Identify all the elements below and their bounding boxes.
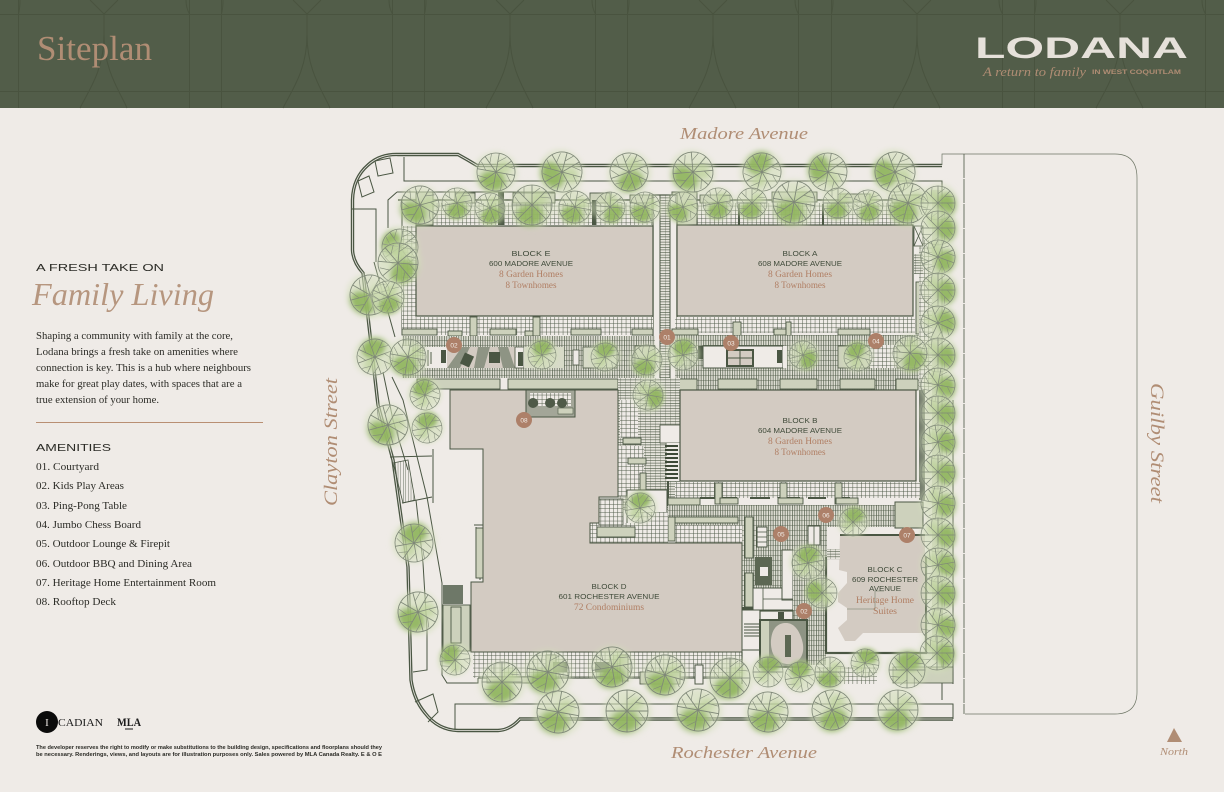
- label: block D: 72 Condominiums: [574, 602, 645, 612]
- label: block E: 8 Townhomes: [506, 280, 557, 290]
- title: Siteplan: [37, 29, 152, 68]
- logo: Lodana: [975, 32, 1188, 79]
- intro paragraph: Lodana brings a fresh take on amenities where: [36, 347, 238, 358]
- logos: Acadian and MLA: I: [45, 717, 49, 729]
- site plan: [339, 141, 1137, 740]
- lounge, firepit and BBQ features: [742, 517, 826, 665]
- street label: Guilby Street: Guilby Street: [1146, 383, 1167, 504]
- amenities list: [36, 443, 216, 608]
- block C footprint: [826, 535, 926, 653]
- paving south of block B: [620, 481, 923, 625]
- label: block A: 8 Townhomes: [774, 280, 826, 290]
- logo: Lodana: LODANA: [975, 32, 1188, 65]
- legal disclaimer: be necessary. Renderings, views, and layouts are for illustration purposes only. Sales powered by MLA Canada Realty. E & O E: [36, 752, 382, 758]
- west row trees: [339, 223, 478, 683]
- street label: Clayton Street: Clayton Street: [321, 377, 342, 506]
- text block: a fresh take on family living: [31, 262, 251, 406]
- label: block E: 600 MADORE AVENUE: [489, 259, 573, 268]
- amenities list: 06. Outdoor BBQ and Dining Area: [36, 559, 192, 570]
- marker 05: [773, 526, 789, 542]
- courtyard and plaza trees: [523, 327, 938, 610]
- trees: [339, 141, 963, 740]
- paving south of block D: [473, 652, 953, 684]
- amenities list: 04. Jumbo Chess Board: [36, 520, 142, 531]
- header banner: [0, 0, 1224, 108]
- label: block B: 8 Garden Homes: [768, 436, 833, 446]
- label: block A: [758, 249, 842, 290]
- intro paragraph: [36, 331, 251, 406]
- marker 07: [899, 527, 915, 543]
- amenities list: 07. Heritage Home Entertainment Room: [36, 578, 216, 589]
- marker 04: 04: [872, 338, 880, 346]
- marker 01: [659, 329, 675, 345]
- script heading: Family Living: [31, 276, 214, 312]
- street and property lines: [352, 154, 1137, 730]
- marker 07: 07: [903, 532, 911, 540]
- logos: Acadian and MLA: MLA: [117, 715, 141, 729]
- intro paragraph: Shaping a community with family at the core,: [36, 331, 233, 342]
- marker 05: 05: [777, 532, 785, 538]
- label: block D: 601 ROCHESTER AVENUE: [558, 592, 660, 601]
- label: block B: 8 Townhomes: [774, 447, 826, 457]
- marker 06: [818, 507, 834, 523]
- logos: Acadian and MLA: CADIAN: [58, 717, 103, 729]
- east row trees: [915, 183, 963, 673]
- amenities list: 02. Kids Play Areas: [36, 481, 124, 492]
- ping-pong court and chess board, east: [698, 345, 923, 368]
- marker 02 south: 02: [800, 608, 808, 616]
- amenities list: 03. Ping-Pong Table: [36, 501, 127, 512]
- label: block E: [489, 249, 573, 290]
- north arrow: [1159, 728, 1189, 758]
- central spine walkway: [653, 195, 677, 505]
- logo: Lodana: A return to family: [982, 64, 1086, 79]
- block D footprint: [450, 390, 742, 652]
- central plaza paving: [618, 378, 680, 510]
- label: block B: BLOCK B: [782, 416, 818, 425]
- amenity markers: [446, 329, 915, 619]
- courtyard brick paths: [402, 335, 920, 391]
- marker 02 south: [796, 603, 812, 619]
- rooftop deck: [526, 390, 575, 417]
- label: block C: 609 ROCHESTER: [852, 575, 918, 584]
- marker 02 west: 02: [450, 342, 458, 350]
- block B footprint: [680, 390, 916, 481]
- marker 03: [723, 335, 739, 351]
- marker 02 west: [446, 337, 462, 353]
- play area and courtyard features, west: [425, 346, 655, 368]
- block A footprint: [677, 225, 913, 316]
- label: block E: 8 Garden Homes: [499, 269, 564, 279]
- building labels: [489, 249, 918, 616]
- marker 08: [516, 412, 532, 428]
- label: block A: BLOCK A: [782, 249, 818, 258]
- intro paragraph: make for great play dates, with spaces that are a: [36, 379, 242, 390]
- label: block A: 608 MADORE AVENUE: [758, 259, 842, 268]
- marker 06: 06: [822, 512, 830, 520]
- street label: Madore Avenue: Madore Avenue: [679, 124, 809, 143]
- west service area of block D: [443, 518, 495, 651]
- label: block C: [852, 565, 918, 616]
- south-west patio of block D: [590, 499, 635, 543]
- intro paragraph: true extension of your home.: [36, 395, 159, 406]
- kids play area south: [742, 610, 807, 667]
- label: block A: 8 Garden Homes: [768, 269, 833, 279]
- street trees, Madore Avenue: [471, 141, 923, 204]
- paving and landscape: [398, 190, 953, 684]
- north row trees: [390, 176, 936, 235]
- label: block D: [558, 582, 660, 612]
- marker 08: 08: [520, 418, 528, 424]
- label: block B: [758, 416, 842, 457]
- label: block B: 604 MADORE AVENUE: [758, 426, 842, 435]
- label: block C: BLOCK C: [868, 565, 903, 574]
- eyebrow heading: A FRESH TAKE ON: [36, 262, 164, 274]
- intro paragraph: connection is key. This is a hub where neighbours: [36, 363, 251, 374]
- amenities list: 01. Courtyard: [36, 462, 100, 473]
- street trees, Rochester Avenue and south row: [479, 642, 928, 740]
- label: block C: AVENUE: [869, 584, 901, 593]
- paving south of blocks E and A: [402, 282, 922, 336]
- label: block C: Suites: [873, 606, 898, 616]
- north paving: [398, 192, 923, 335]
- block E footprint: [416, 226, 653, 316]
- legal disclaimer: [36, 745, 382, 758]
- marker 04: [868, 333, 884, 349]
- north arrow: North: [1159, 746, 1189, 758]
- amenities list: 05. Outdoor Lounge & Firepit: [36, 539, 170, 550]
- marker 01: 01: [663, 334, 671, 342]
- buildings: [416, 225, 926, 653]
- logos: Acadian and MLA: [36, 711, 141, 733]
- label: block E: BLOCK E: [512, 249, 551, 258]
- amenities heading: AMENITIES: [36, 443, 111, 454]
- amenities list: 08. Rooftop Deck: [36, 597, 117, 608]
- label: block C: Heritage Home: [856, 595, 914, 605]
- east edge: [914, 190, 941, 660]
- label: block D: BLOCK D: [592, 582, 626, 591]
- legal disclaimer: The developer reserves the right to modify or make substitutions to the building design, specifications and floorplans should they: [36, 745, 382, 751]
- logo: Lodana: IN WEST COQUITLAM: [1092, 69, 1181, 76]
- street label: Rochester Avenue: Rochester Avenue: [670, 743, 818, 762]
- marker 03: 03: [727, 340, 735, 348]
